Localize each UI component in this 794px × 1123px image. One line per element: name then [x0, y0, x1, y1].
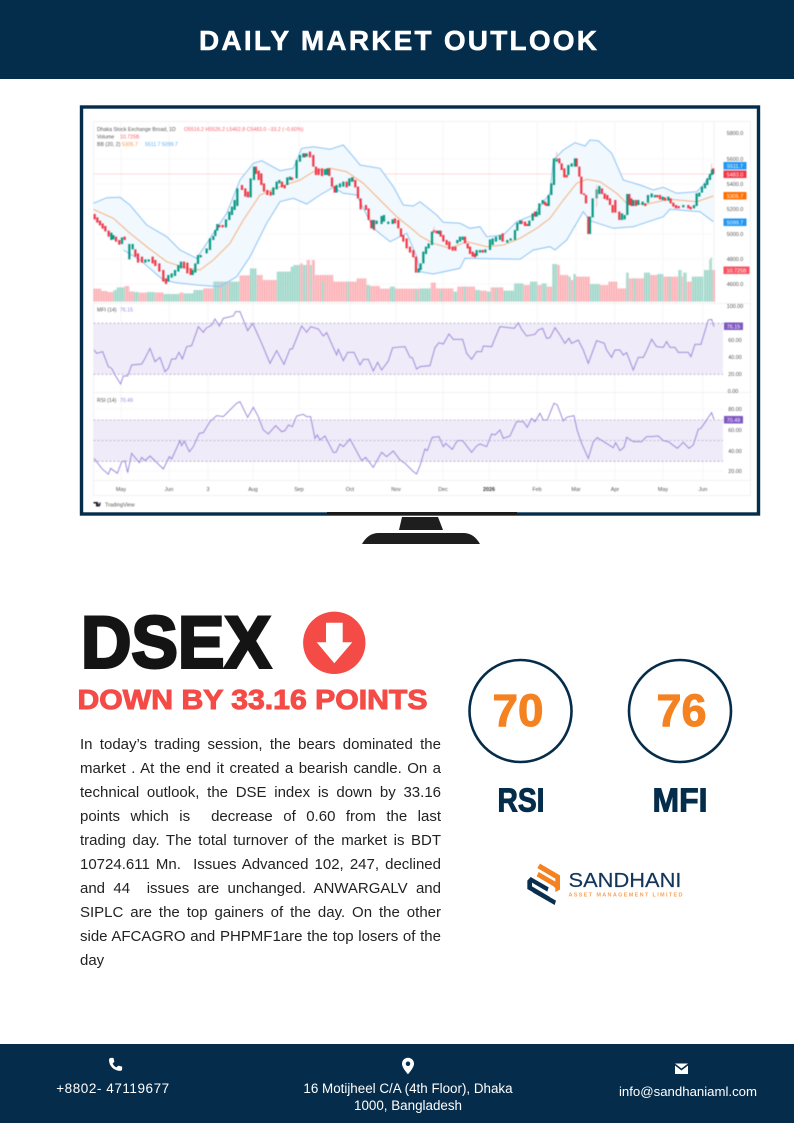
header band [0, 0, 794, 79]
market commentary paragraph: trading day. The total turnover of the market is BDT [80, 832, 441, 849]
RSI line [94, 402, 714, 474]
price tags: 5511.7 [727, 164, 743, 170]
date axis labels: Sep [294, 487, 304, 493]
date axis labels: Feb [532, 487, 542, 493]
price axis labels: 100.00 [727, 304, 743, 310]
volume bars [93, 257, 715, 302]
date axis labels: Nov [391, 487, 401, 493]
chart legend text: 10.725B [120, 134, 140, 140]
contact: address [303, 1058, 513, 1113]
RSI panel [94, 402, 723, 474]
MFI gauge: 76 [656, 685, 706, 736]
date axis labels: Dec [438, 487, 448, 493]
Sandhani logo: ASSET MANAGEMENT LIMITED [568, 892, 683, 898]
price tags: 70.49 [727, 418, 740, 424]
icon: envelope [675, 1064, 688, 1074]
market commentary paragraph: 10724.611 Mn. Issues Advanced 102, 247, declined [80, 856, 441, 873]
price axis labels: 4600.0 [727, 282, 743, 288]
date axis labels: 2026 [483, 487, 495, 493]
market commentary paragraph: In today’s trading session, the bears dominated the [80, 736, 441, 753]
price axis labels: 5000.0 [727, 232, 743, 238]
title: DAILY MARKET OUTLOOK [199, 25, 597, 56]
chart legend text: 70.49 [120, 398, 133, 404]
price axis labels: 4800.0 [727, 257, 743, 263]
chart legend text: 5305.7 [122, 142, 138, 148]
date axis labels: Jun [165, 487, 173, 493]
MFI panel [94, 312, 723, 384]
contact: email [619, 1064, 757, 1099]
date axis labels: 3 [206, 487, 210, 493]
price axis labels: 5600.0 [727, 157, 743, 163]
price tags: 5305.7 [727, 194, 743, 200]
monitor stand [362, 517, 480, 544]
market commentary paragraph: points which is decrease of 0.60 from the last [80, 808, 441, 825]
price axis labels: 80.00 [728, 407, 742, 413]
icon: map pin [402, 1058, 414, 1074]
chart legend text: BB (20, 2) [97, 142, 121, 148]
price axis labels: 20.00 [728, 469, 742, 475]
price tags: 5483.0 [727, 172, 743, 178]
price axis labels: 5400.0 [727, 182, 743, 188]
RSI gauge: 70 [492, 685, 544, 736]
date axis labels: May [658, 487, 668, 493]
monitor frame [82, 107, 758, 515]
market commentary paragraph: day [80, 952, 104, 969]
icon: phone [109, 1058, 122, 1071]
date axis labels: Mar [571, 487, 581, 493]
price axis labels: 60.00 [728, 428, 742, 434]
chart legend text [97, 127, 304, 404]
chart legend text: O5516.2 H5526.2 L5462.8 C5483.0 −33.2 (−0.60%) [184, 127, 304, 133]
chart legend text: Volume [97, 134, 114, 140]
footer band [0, 1044, 794, 1123]
market commentary paragraph: SIPLC are the top gainers of the day. On the other [80, 904, 441, 921]
price axis labels [727, 131, 743, 475]
TradingView logo [94, 502, 135, 508]
price axis labels: 40.00 [728, 355, 742, 361]
date axis labels [116, 487, 707, 493]
chart legend text: Dhaka Stock Exchange Broad, 1D [97, 127, 176, 133]
contact: email: info@sandhaniaml.com [619, 1084, 757, 1099]
chart panel [93, 122, 751, 508]
date axis labels: Jun [699, 487, 707, 493]
price tags [724, 162, 750, 424]
market commentary paragraph [80, 736, 441, 969]
price axis labels: 5200.0 [727, 207, 743, 213]
MFI line [94, 312, 714, 384]
monitor with trading chart [80, 105, 760, 544]
contact: address: 1000, Bangladesh [354, 1098, 462, 1113]
price tags: 5099.7 [727, 220, 743, 226]
chart legend text: RSI (14) [97, 398, 117, 404]
date axis labels: May [116, 487, 126, 493]
market commentary paragraph: side AFCAGRO and PHPMF1are the top losers of the [80, 928, 441, 945]
chart legend text: 76.15 [120, 308, 133, 314]
date axis labels: Apr [611, 487, 619, 493]
date axis labels: Aug [248, 487, 258, 493]
Sandhani logo [527, 864, 683, 905]
bollinger bands [93, 140, 713, 287]
price axis labels: 60.00 [728, 338, 742, 344]
icon: down arrow in red circle [303, 612, 366, 674]
MFI gauge [628, 658, 732, 816]
subheading: down by points: DOWN BY 33.16 POINTS [78, 684, 428, 715]
market commentary paragraph: technical outlook, the DSE index is down by 33.16 [80, 784, 441, 801]
price axis labels: 40.00 [728, 449, 742, 455]
contact: phone [56, 1058, 170, 1096]
price tags: 76.15 [727, 324, 740, 330]
chart legend text: MFI (14) [97, 308, 117, 314]
TradingView logo: TradingView [105, 502, 135, 508]
icon: logo mark [527, 864, 560, 905]
Sandhani logo: SANDHANI [568, 870, 682, 892]
price axis labels: 5800.0 [727, 131, 743, 137]
contact: address: 16 Motijheel C/A (4th Floor), Dhaka [303, 1081, 513, 1096]
date axis labels: Oct [346, 487, 355, 493]
price axis labels: 20.00 [728, 372, 742, 378]
price axis labels: 0.00 [728, 389, 738, 395]
RSI gauge [468, 658, 573, 816]
bollinger band fill [93, 140, 713, 287]
price tags: 10.725B [726, 268, 747, 274]
candlesticks [95, 152, 713, 284]
market commentary paragraph: market . At the end it created a bearish candle. On a [80, 760, 441, 777]
market commentary paragraph: and 44 issues are unchanged. ANWARGALV and [80, 880, 441, 897]
chart legend text: 5511.7 5099.7 [145, 142, 178, 148]
contact: phone: +8802- 47119677 [56, 1081, 170, 1096]
